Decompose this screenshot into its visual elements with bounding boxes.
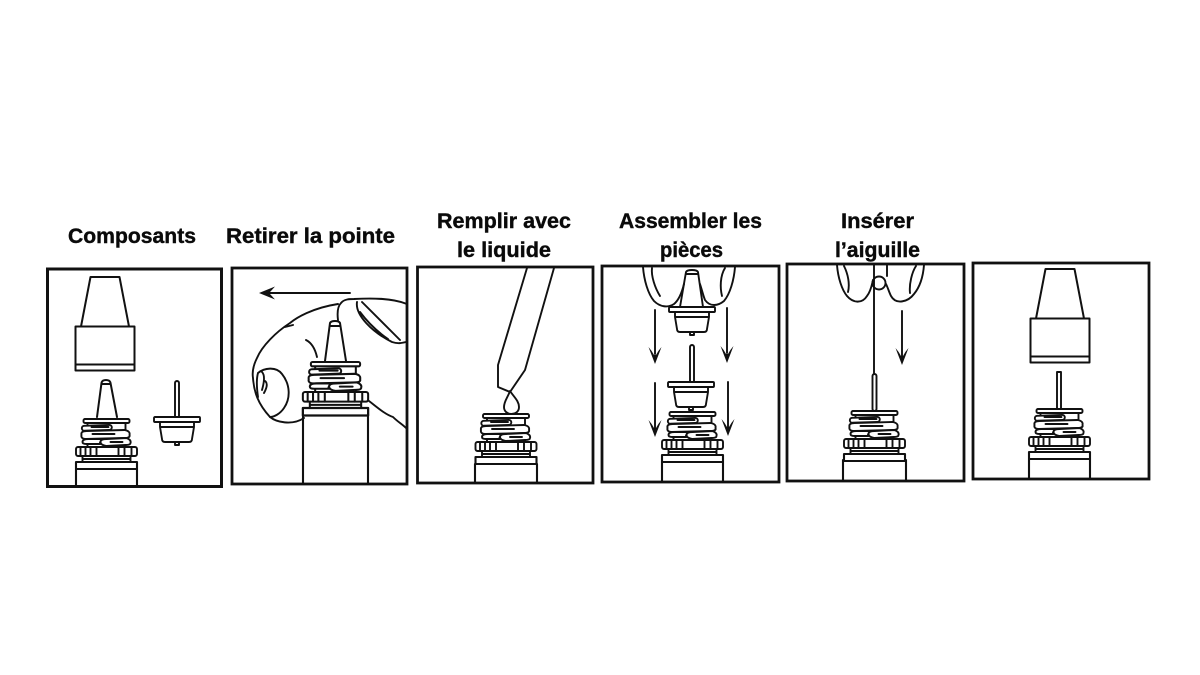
needle bbox=[1057, 372, 1061, 409]
heading: Remplir avec le liquide: le liquide bbox=[457, 239, 551, 262]
heading: Insérer l'aiguille bbox=[835, 210, 920, 262]
panel 3: fill with liquid bbox=[418, 267, 593, 483]
bottle bbox=[843, 411, 906, 481]
bottle bbox=[303, 362, 368, 484]
heading: Composants: Composants bbox=[68, 225, 196, 248]
hand holding bottle bbox=[253, 299, 407, 428]
nozzle bbox=[325, 321, 346, 361]
arrow left bbox=[259, 286, 350, 300]
panel 2: remove the tip bbox=[232, 268, 407, 484]
arrows down bbox=[648, 308, 734, 437]
dropper bbox=[498, 268, 554, 392]
heading: Insérer l'aiguille: l’aiguille bbox=[835, 239, 920, 262]
outer cap bbox=[76, 277, 134, 370]
drop bbox=[504, 391, 519, 414]
heading: Assembler les pièces: Assembler les bbox=[619, 210, 762, 233]
heading: Retirer la pointe: Retirer la pointe bbox=[226, 225, 395, 248]
upper needle cup bbox=[669, 307, 715, 335]
needle piece bbox=[668, 345, 714, 410]
fingers with needle bbox=[837, 265, 924, 375]
heading: Remplir avec le liquide: Remplir avec bbox=[437, 210, 571, 233]
bottle bbox=[475, 414, 537, 483]
bottle bbox=[662, 412, 723, 482]
fingers holding nozzle bbox=[643, 267, 735, 307]
arrow down bbox=[896, 311, 908, 365]
heading: Assembler les pièces bbox=[619, 210, 762, 262]
panel 4: assemble parts bbox=[602, 266, 779, 482]
bottle with nozzle bbox=[76, 380, 137, 486]
panel 5: insert the needle bbox=[787, 264, 964, 481]
needle piece bbox=[154, 381, 200, 445]
heading: Remplir avec le liquide bbox=[437, 210, 571, 262]
cap bbox=[1030, 269, 1090, 362]
panel 6: replace the cap bbox=[973, 263, 1149, 479]
heading: Assembler les pièces: pièces bbox=[660, 239, 723, 262]
needle bbox=[872, 374, 876, 411]
heading: Insérer l'aiguille: Insérer bbox=[841, 210, 914, 233]
bottle bbox=[1029, 409, 1090, 479]
panel 1: components bbox=[48, 269, 222, 486]
